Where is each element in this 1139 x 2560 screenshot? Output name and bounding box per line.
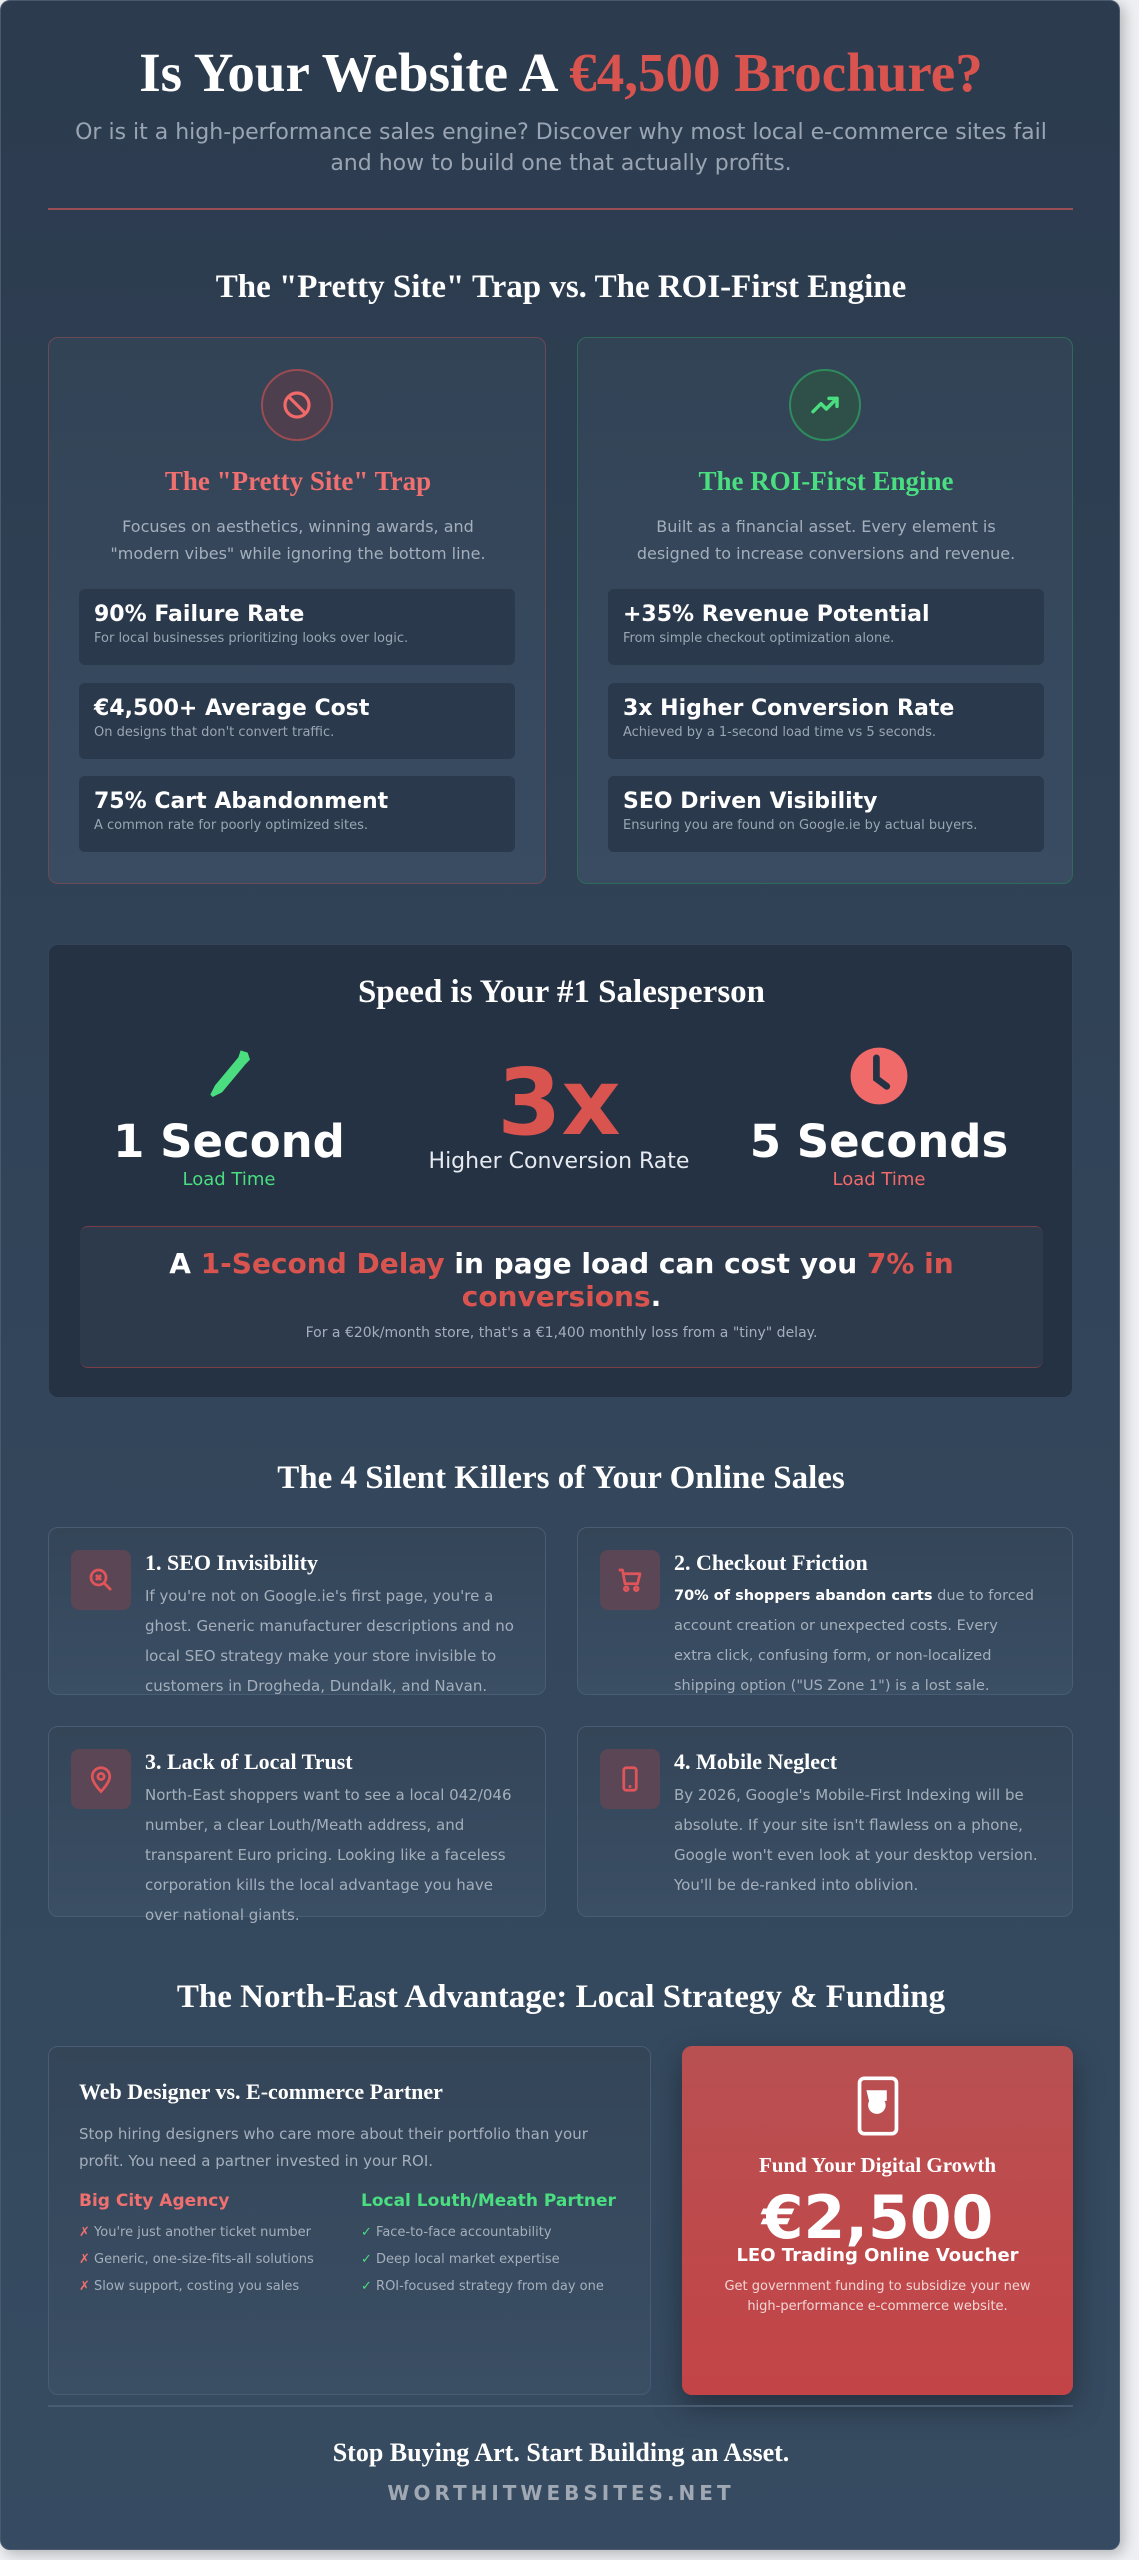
card: SEO invisibility: If you're not on Google.ie's first page, you're a ghost. Generic manufacturer descriptions and no local SEO strategy make your store invisible to customers in Drogheda, Dundalk, and Navan. bbox=[145, 1587, 514, 1695]
card: mobile neglect: 4. Mobile Neglect bbox=[674, 1749, 837, 1774]
card: local trust: number, a clear Louth/Meath address, and bbox=[145, 1816, 464, 1834]
description: Built as a financial asset. Every element is designed to increase conversions and revenue. bbox=[637, 517, 1015, 563]
card: local trust: over national giants. bbox=[145, 1906, 300, 1924]
list: local partner: ✓ Deep local market expertise bbox=[361, 2252, 560, 2267]
callout: delay cost: For a €20k/month store, that's a €1,400 monthly loss from a "tiny" delay. bbox=[306, 1325, 817, 1341]
heading: comparison: The "Pretty Site" Trap vs. The ROI-First Engine bbox=[216, 269, 906, 305]
heading: silent killers: The 4 Silent Killers of Your Online Sales bbox=[277, 1460, 845, 1496]
stat 3 bbox=[79, 776, 515, 852]
icon: clock bbox=[850, 1048, 908, 1104]
subtitle: and how to build one that actually profits. bbox=[330, 151, 792, 176]
footer url: WORTHITWEBSITES.NET bbox=[387, 2481, 735, 2505]
card: checkout friction: account creation or unexpected costs. Every bbox=[674, 1618, 998, 1634]
list: local partner bbox=[361, 2191, 616, 2294]
icon: voucher bbox=[858, 2076, 898, 2136]
panel: funding voucher: Get government funding to subsidize your new high-performance e-commerce website. bbox=[724, 2279, 1031, 2314]
callout: delay cost bbox=[80, 1226, 1043, 1368]
stat: 5 seconds: 5 Seconds bbox=[750, 1115, 1008, 1168]
card: local trust: transparent Euro pricing. Looking like a faceless bbox=[145, 1846, 506, 1864]
stat 1 bbox=[608, 589, 1044, 665]
icon: rocket bbox=[210, 1050, 250, 1097]
title: Is Your Website A €4,500 Brochure? bbox=[139, 42, 983, 103]
stat: 5 seconds bbox=[750, 1048, 1008, 1190]
panel heading: The "Pretty Site" Trap bbox=[165, 466, 431, 496]
panel: web designer vs partner bbox=[48, 2046, 651, 2395]
stat 1: For local businesses prioritizing looks over logic. bbox=[94, 631, 408, 646]
panel: funding voucher: LEO Trading Online Voucher bbox=[736, 2245, 1019, 2266]
panel heading: The ROI-First Engine bbox=[698, 466, 954, 496]
stat 1: +35% Revenue Potential bbox=[623, 602, 930, 627]
card: checkout friction: extra click, confusing form, or non-localized bbox=[674, 1648, 991, 1664]
stat 2 bbox=[79, 683, 515, 759]
card: checkout friction: shipping option ("US Zone 1") is a lost sale. bbox=[674, 1678, 990, 1694]
list: big city agency: ✗ You're just another ticket number bbox=[79, 2225, 311, 2240]
stat: 5 seconds: Load Time bbox=[833, 1169, 925, 1190]
card: local trust bbox=[48, 1726, 546, 1917]
stat: 3x bbox=[429, 1049, 689, 1174]
stat 2: €4,500+ Average Cost bbox=[94, 696, 369, 721]
card: checkout friction: 2. Checkout Friction bbox=[674, 1550, 868, 1575]
stat: 1 second: 1 Second bbox=[113, 1115, 345, 1168]
list: local partner: ✓ ROI-focused strategy from day one bbox=[361, 2279, 604, 2294]
stat: 1 second bbox=[113, 1050, 345, 1190]
stat 3: 75% Cart Abandonment bbox=[94, 789, 388, 814]
description: Focuses on aesthetics, winning awards, and "modern vibes" while ignoring the bottom line. bbox=[110, 517, 486, 563]
panel: funding voucher: €2,500 bbox=[762, 2183, 993, 2253]
panel: funding voucher: Fund Your Digital Growth bbox=[759, 2153, 996, 2177]
stat 1: From simple checkout optimization alone. bbox=[623, 631, 894, 646]
subtitle bbox=[75, 120, 1047, 176]
panel: funding voucher bbox=[682, 2046, 1073, 2395]
panel: speed bbox=[48, 944, 1073, 1398]
card: local trust: 3. Lack of Local Trust bbox=[145, 1749, 353, 1774]
icon: cart bbox=[600, 1550, 660, 1610]
panel: ROI-first engine bbox=[577, 337, 1073, 884]
callout: delay cost: A 1-Second Delay in page load can cost you 7% in conversions. bbox=[169, 1247, 954, 1313]
card: SEO invisibility bbox=[48, 1527, 546, 1695]
stat 3: SEO Driven Visibility bbox=[623, 789, 878, 814]
stat 2: Achieved by a 1-second load time vs 5 seconds. bbox=[623, 725, 936, 740]
description: Stop hiring designers who care more about their portfolio than your profit. You need a partner invested in your ROI. bbox=[79, 2125, 588, 2170]
icon: search bbox=[71, 1550, 131, 1610]
stat 1: 90% Failure Rate bbox=[94, 602, 304, 627]
speed heading: Speed is Your #1 Salesperson bbox=[358, 974, 765, 1010]
panel: pretty site trap bbox=[48, 337, 546, 884]
stat 1 bbox=[79, 589, 515, 665]
subtitle: Or is it a high-performance sales engine? Discover why most local e-commerce sites fail bbox=[75, 120, 1047, 145]
icon: trend up bbox=[789, 369, 861, 441]
stat 3: A common rate for poorly optimized sites. bbox=[94, 818, 368, 833]
list: big city agency: Big City Agency bbox=[79, 2191, 229, 2211]
card: local trust: North-East shoppers want to see a local 042/046 bbox=[145, 1786, 512, 1804]
stat: 1 second: Load Time bbox=[183, 1169, 275, 1190]
list: big city agency bbox=[79, 2191, 314, 2294]
stat: 3x: Higher Conversion Rate bbox=[429, 1149, 689, 1174]
stat 3: Ensuring you are found on Google.ie by actual buyers. bbox=[623, 818, 977, 833]
stat 2: On designs that don't convert traffic. bbox=[94, 725, 334, 740]
icon: phone bbox=[600, 1749, 660, 1809]
list: local partner: Local Louth/Meath Partner bbox=[361, 2191, 616, 2211]
heading: north-east: The North-East Advantage: Local Strategy & Funding bbox=[177, 1979, 945, 2015]
stat 2: 3x Higher Conversion Rate bbox=[623, 696, 954, 721]
card: mobile neglect bbox=[577, 1726, 1073, 1917]
stat: 3x: 3x bbox=[497, 1049, 621, 1156]
stat 3 bbox=[608, 776, 1044, 852]
stat 2 bbox=[608, 683, 1044, 759]
list: big city agency: ✗ Generic, one-size-fits-all solutions bbox=[79, 2252, 314, 2267]
card: SEO invisibility: 1. SEO Invisibility bbox=[145, 1550, 318, 1575]
icon: pin bbox=[71, 1749, 131, 1809]
card: checkout friction: 70% of shoppers abandon carts due to forced bbox=[674, 1588, 1034, 1604]
list: big city agency: ✗ Slow support, costing you sales bbox=[79, 2279, 299, 2294]
card: mobile neglect: By 2026, Google's Mobile-First Indexing will be absolute. If your site isn't flawless on a phone, Google won't even look at your desktop version. You'll be de-ranked into oblivion. bbox=[674, 1786, 1038, 1894]
card: local trust: corporation kills the local advantage you have bbox=[145, 1876, 493, 1894]
card: checkout friction bbox=[577, 1527, 1073, 1695]
icon: ban bbox=[261, 369, 333, 441]
panel: web designer vs partner: Web Designer vs. E-commerce Partner bbox=[79, 2079, 443, 2104]
footer tagline: Stop Buying Art. Start Building an Asset. bbox=[333, 2438, 789, 2467]
list: local partner: ✓ Face-to-face accountability bbox=[361, 2225, 552, 2240]
